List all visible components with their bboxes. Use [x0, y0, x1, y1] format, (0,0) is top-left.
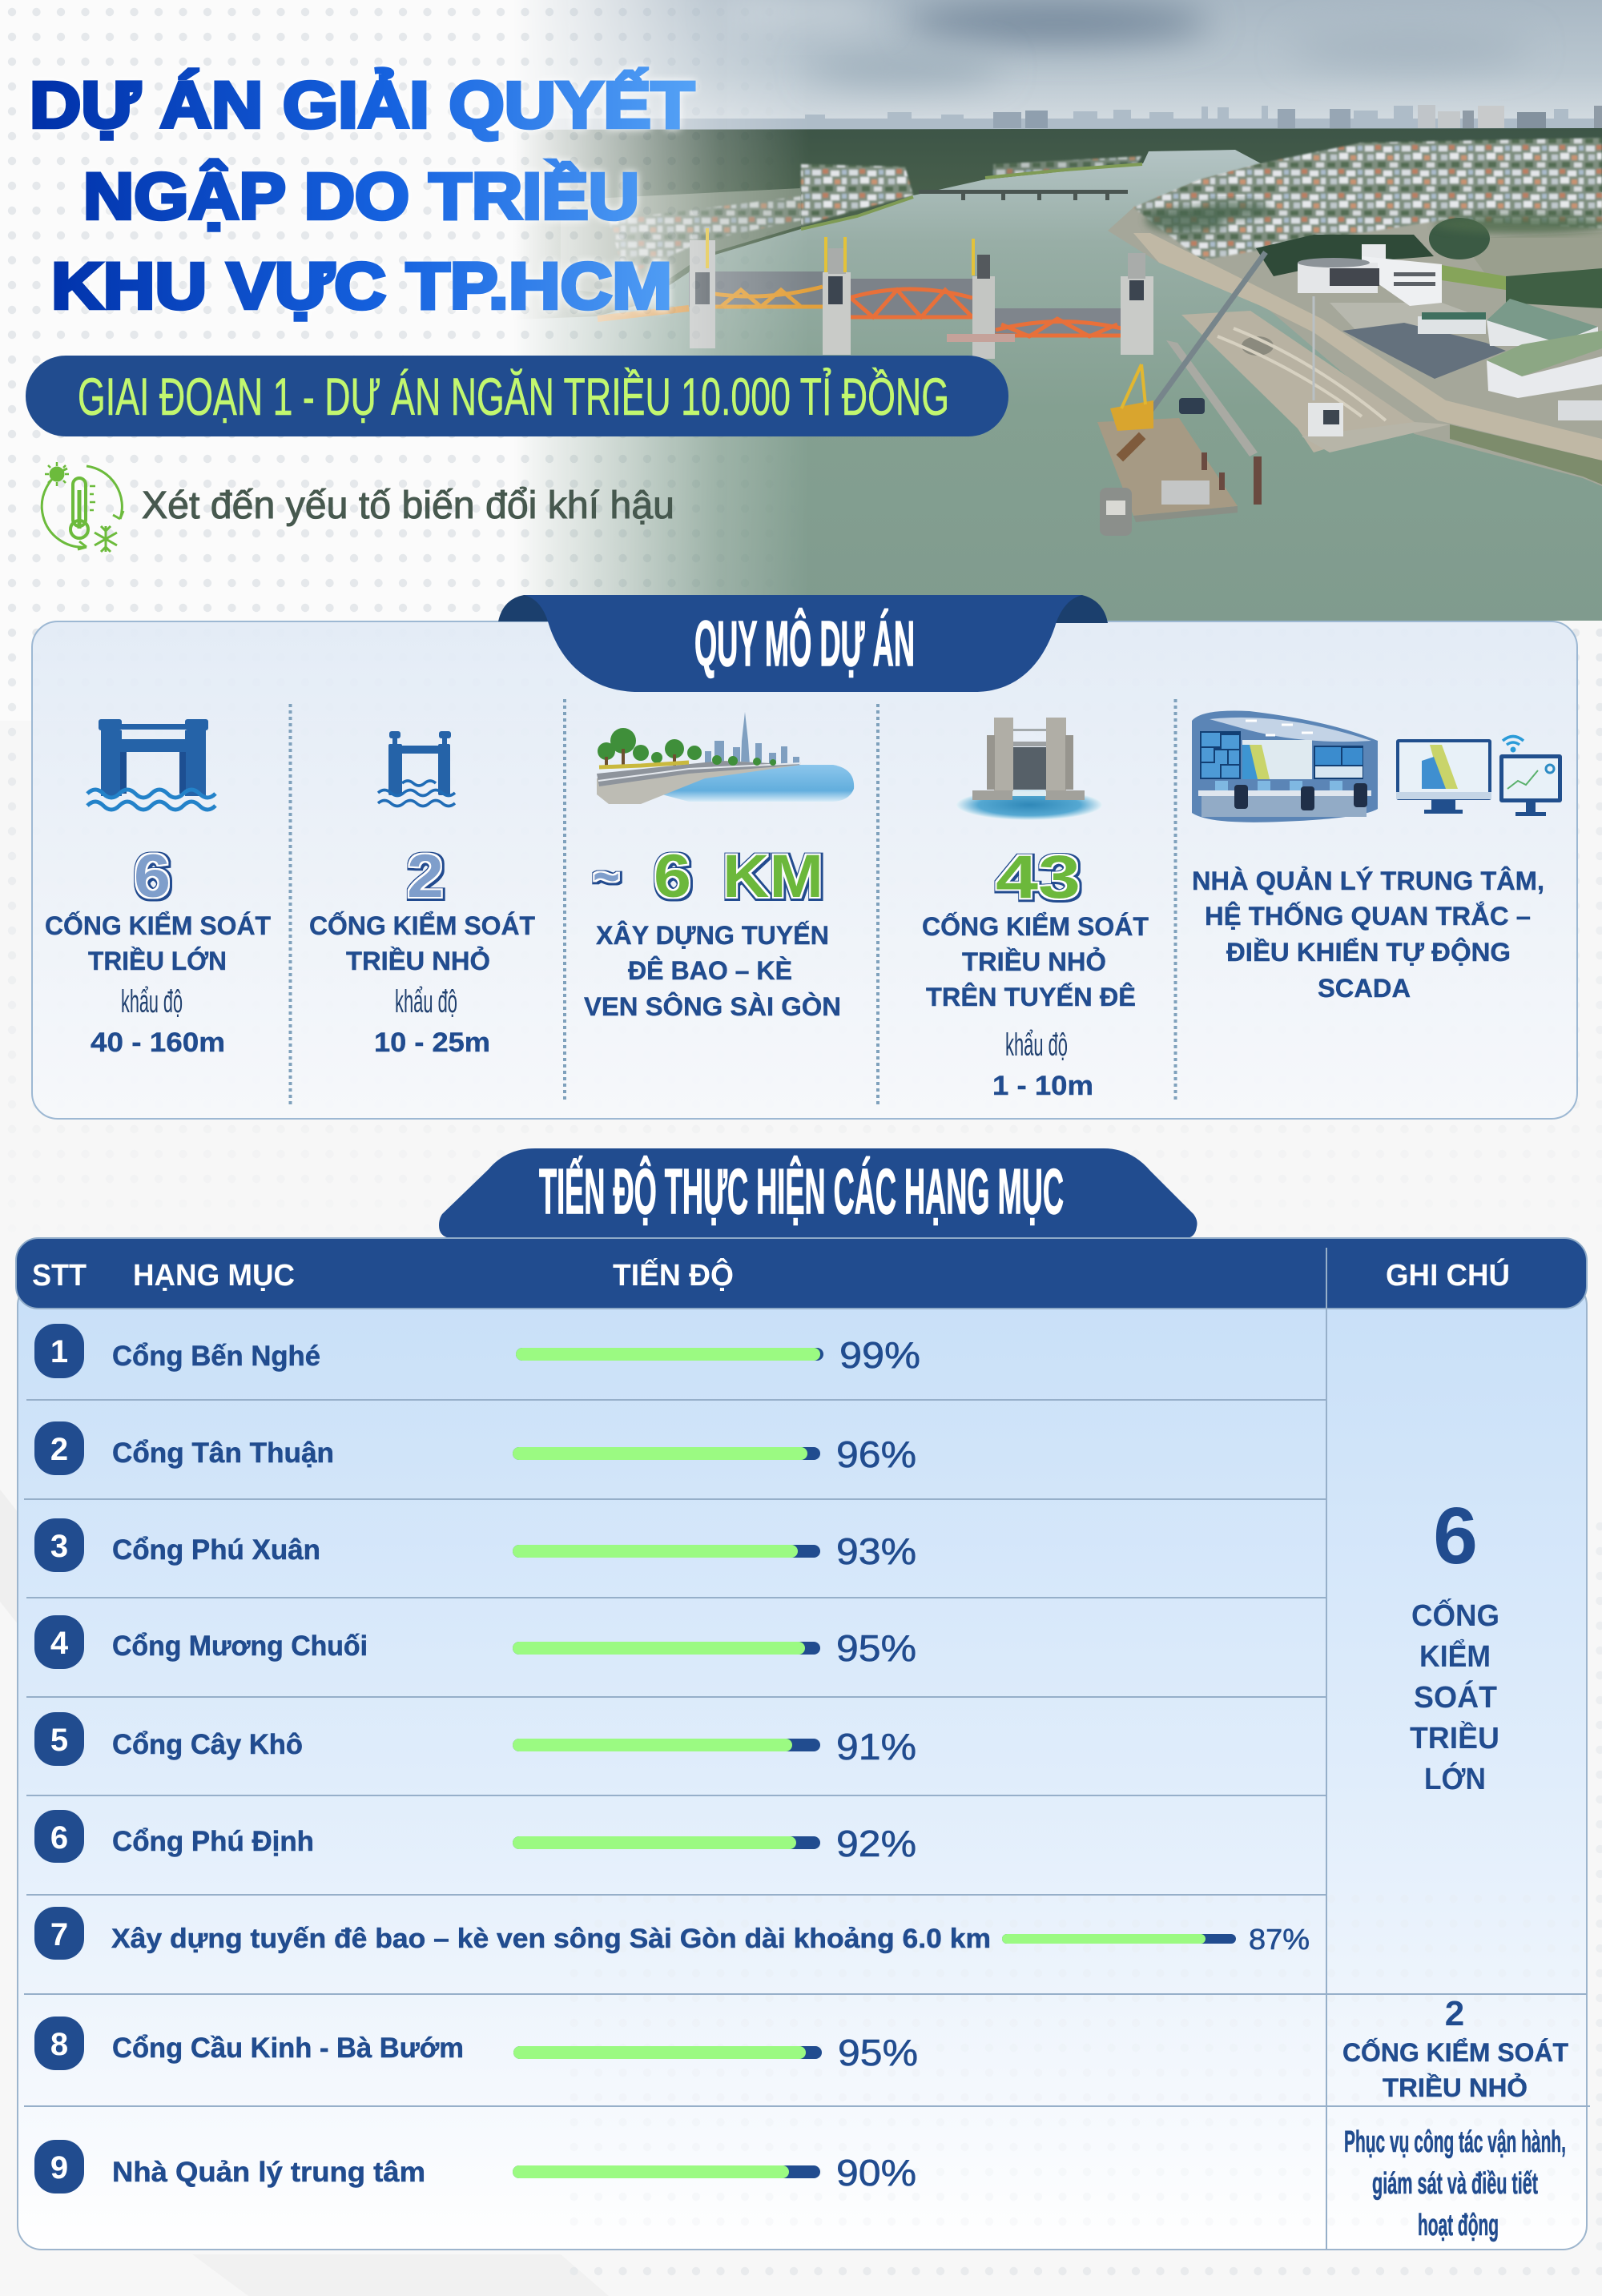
label: embankment gates: khẩu độ: [1005, 1027, 1068, 1063]
stat: 6: 6: [134, 842, 171, 911]
row 1: Cổng Bến Nghé: [112, 1341, 320, 1372]
table header: [16, 1238, 1587, 1309]
progress bar 91%: [513, 1739, 820, 1751]
central management building: [1298, 244, 1442, 306]
note: management centre purpose: [1344, 2125, 1566, 2242]
progress bar 87%: [1002, 1934, 1236, 1944]
section heading: progress: [439, 1148, 1197, 1238]
progress bar 95%: [513, 2046, 822, 2059]
section heading: project scale: QUY MÔ DỰ ÁN: [694, 608, 915, 679]
icon: large gate: [87, 719, 215, 810]
row 5: 91%: [836, 1726, 916, 1767]
row 3: Cổng Phú Xuân: [112, 1534, 320, 1566]
icon: small gate: [378, 731, 455, 806]
label: large gates: CỐNG KIỂM SOÁT: [45, 911, 271, 940]
row 2: Cổng Tân Thuận: [112, 1438, 334, 1469]
row 3: 93%: [836, 1530, 916, 1572]
note: 2 small tide gates: [1342, 1994, 1568, 2102]
label: small gates: CỐNG KIỂM SOÁT: [309, 911, 535, 940]
column 3: 6 km embankment: [584, 712, 854, 1021]
label: embankment gates: 1 - 10m: [992, 1071, 1093, 1101]
row 9: 9: [50, 2150, 68, 2185]
table header: TIẾN ĐỘ: [613, 1257, 734, 1293]
title line 1: DỰ ÁN GIẢI QUYẾT: [30, 69, 694, 142]
label: management centre: SCADA: [1318, 974, 1411, 1003]
note: 2 small tide gates: TRIỀU NHỎ: [1383, 2073, 1528, 2102]
label: embankment: VEN SÔNG SÀI GÒN: [584, 992, 841, 1021]
row 5: [34, 1712, 916, 1767]
label: embankment gates: TRIỀU NHỎ: [962, 947, 1106, 976]
row 2: [34, 1421, 916, 1475]
stat: 6 km: [593, 842, 823, 911]
row 6: 92%: [836, 1823, 916, 1864]
note: 6 large tide gates: 6: [1433, 1491, 1478, 1581]
stat: 6 km: 6: [654, 842, 691, 911]
title line 2: NGẬP DO TRIỀU: [83, 160, 639, 233]
row 7: [34, 1907, 1310, 1960]
image: monitor and tablet with wifi: [1396, 737, 1562, 816]
row 6: 6: [50, 1820, 68, 1856]
note: 6 large tide gates: [1410, 1491, 1499, 1796]
label: embankment: ĐÊ BAO – KÈ: [628, 956, 792, 985]
row 2: 2: [50, 1432, 68, 1467]
hero photo: river tide gate aerial view: [525, 0, 1602, 621]
row 1: 1: [50, 1334, 68, 1369]
progress table: [16, 1238, 1590, 2250]
label: large gates: TRIỀU LỚN: [88, 947, 227, 975]
column 5: central management and SCADA: [1192, 711, 1562, 1003]
stat: 43: 43: [996, 843, 1081, 911]
label: management centre: [1192, 867, 1544, 1003]
note: management centre purpose: hoạt động: [1418, 2209, 1499, 2242]
label: small gates: 10 - 25m: [374, 1027, 490, 1058]
table body: [18, 1281, 1587, 2250]
column 2: 2 small tide gates: [309, 731, 535, 1058]
climate note: Xét đến yếu tố biến đổi khí hậu: [142, 485, 674, 527]
stat: 6 km: ~: [593, 845, 620, 907]
row 8: 95%: [838, 2032, 918, 2073]
row 7: 87%: [1249, 1923, 1310, 1956]
table header: GHI CHÚ: [1386, 1257, 1510, 1293]
progress bar 92%: [513, 1836, 820, 1849]
label: large gates: khẩu độ: [121, 984, 183, 1019]
table header: STT: [32, 1259, 87, 1293]
label: embankment: XÂY DỰNG TUYẾN: [596, 921, 829, 950]
label: small gates: TRIỀU NHỎ: [346, 947, 490, 975]
row 9: [34, 2140, 916, 2193]
column 1: 6 large tide gates: [45, 719, 271, 1058]
row 2: 96%: [836, 1433, 916, 1475]
green roof warehouses and yard: [1342, 299, 1602, 420]
row 8: 8: [50, 2027, 68, 2062]
label: management centre: ĐIỀU KHIỂN TỰ ĐỘNG: [1226, 938, 1511, 967]
label: embankment gates: TRÊN TUYẾN ĐÊ: [926, 983, 1136, 1011]
row 8: [34, 2017, 918, 2073]
image: control room: [1192, 711, 1378, 822]
note: 6 large tide gates: SOÁT: [1414, 1679, 1497, 1715]
distant road bridge: [919, 190, 1128, 200]
row 1: 99%: [839, 1334, 920, 1376]
icon: climate thermometer with sun and snowflake: [42, 462, 123, 552]
progress bar 99%: [516, 1348, 823, 1361]
row 9: Nhà Quản lý trung tâm: [112, 2157, 425, 2188]
label: small gates: [309, 911, 535, 1058]
title line 3: KHU VỰC TP.HCM: [51, 250, 672, 323]
label: large gates: 40 - 160m: [91, 1027, 225, 1058]
note: 2 small tide gates: 2: [1445, 1994, 1464, 2033]
moored barge with crane: [1097, 252, 1266, 536]
river water: [532, 150, 1602, 621]
main title: [30, 69, 694, 323]
city skyline: [569, 105, 1602, 130]
image: riverside embankment and skyline: [597, 712, 854, 804]
phase banner: [26, 356, 1008, 436]
row 9: 90%: [836, 2152, 916, 2193]
row 7: 7: [50, 1917, 68, 1952]
sky with clouds: [540, 0, 1602, 119]
phase banner: GIAI ĐOẠN 1 - DỰ ÁN NGĂN TRIỀU 10.000 TỈ ĐỒNG: [78, 367, 949, 426]
image: concrete sluice gate: [956, 718, 1102, 820]
note: 6 large tide gates: CỐNG: [1411, 1597, 1499, 1633]
row 4: 4: [50, 1626, 69, 1661]
note: 6 large tide gates: LỚN: [1424, 1761, 1486, 1796]
progress bar 96%: [513, 1447, 820, 1460]
label: small gates: khẩu độ: [395, 984, 457, 1019]
row 4: [34, 1615, 916, 1669]
column 4: 43 small gates on embankment: [922, 718, 1149, 1101]
row 5: 5: [50, 1723, 68, 1758]
note: 6 large tide gates: TRIỀU: [1410, 1720, 1499, 1755]
row 3: [34, 1518, 916, 1572]
progress bar 95%: [513, 1642, 820, 1655]
left bank houses: [561, 156, 1142, 298]
table header: HẠNG MỤC: [133, 1259, 295, 1293]
stat: 6 km: KM: [723, 842, 823, 911]
label: management centre: HỆ THỐNG QUAN TRẮC –: [1205, 902, 1531, 931]
label: embankment gates: [922, 912, 1149, 1101]
progress bar 90%: [513, 2165, 820, 2178]
row 4: Cổng Mương Chuối: [112, 1631, 368, 1662]
row 6: Cổng Phú Định: [112, 1826, 314, 1857]
section heading: project scale: [498, 595, 1108, 692]
row 7: Xây dựng tuyến đê bao – kè ven sông Sài Gòn dài khoảng 6.0 km: [111, 1924, 991, 1954]
far forest band and left bank: [481, 128, 1602, 320]
tide gate with orange truss: [598, 228, 1153, 359]
label: large gates: [45, 911, 271, 1058]
note: 2 small tide gates: CỐNG KIỂM SOÁT: [1342, 2038, 1568, 2067]
construction pad and lock walls: [1166, 296, 1450, 456]
right bank land and houses: [1108, 138, 1602, 486]
row 4: 95%: [836, 1627, 916, 1669]
row 6: [34, 1810, 916, 1864]
row 5: Cổng Cây Khô: [112, 1729, 303, 1760]
stat: 2: 2: [407, 842, 444, 911]
panel: project scale: [32, 595, 1577, 1119]
label: management centre: NHÀ QUẢN LÝ TRUNG TÂM,: [1192, 867, 1544, 895]
row 8: Cổng Cầu Kinh - Bà Bướm: [112, 2033, 464, 2064]
row 3: 3: [50, 1529, 68, 1564]
progress bar 93%: [513, 1545, 820, 1558]
label: embankment gates: CỐNG KIỂM SOÁT: [922, 912, 1149, 941]
note: 6 large tide gates: KIỂM: [1419, 1638, 1491, 1674]
label: embankment: [584, 921, 841, 1021]
row 1: [34, 1324, 920, 1378]
